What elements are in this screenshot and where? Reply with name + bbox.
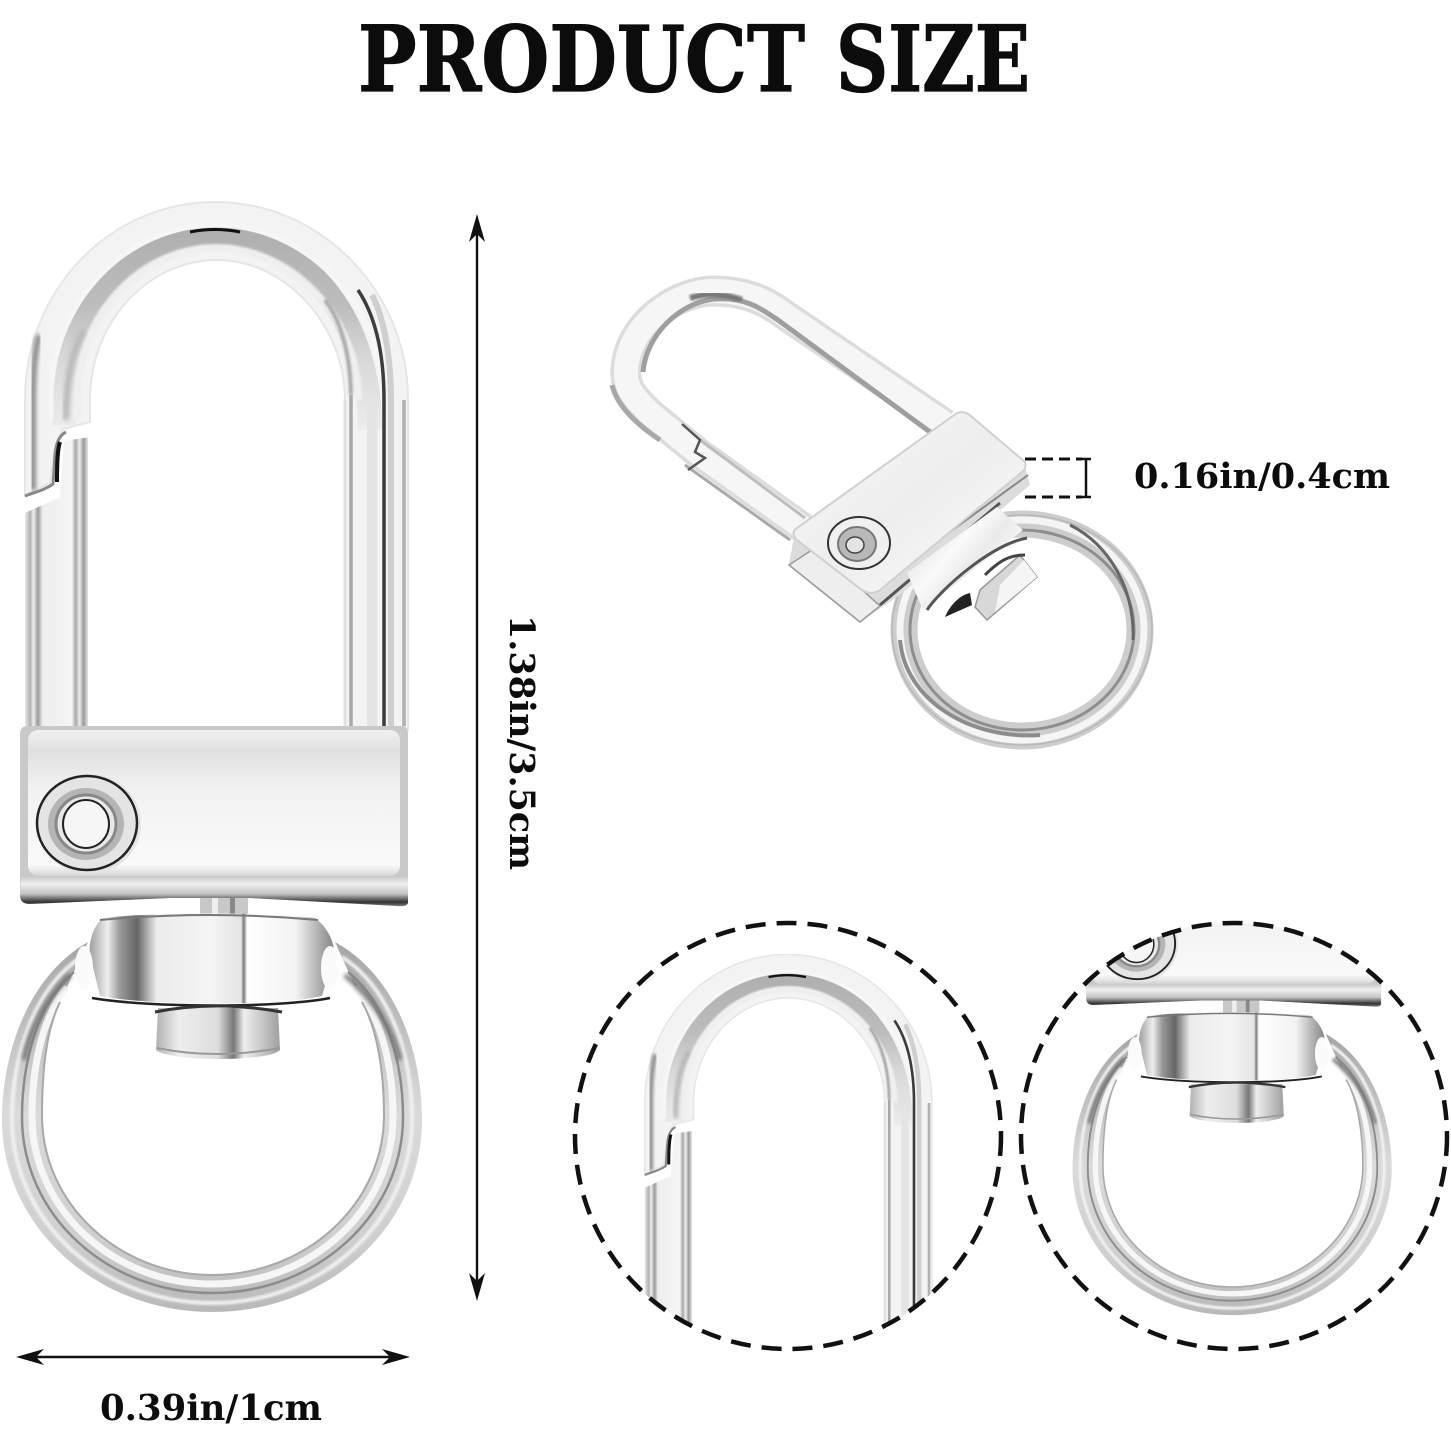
dashed outline (1021, 923, 1447, 1349)
height label: 1.38in/3.5cm (501, 615, 542, 870)
ring (892, 515, 1152, 745)
title: PRODUCT (358, 7, 805, 113)
magnified gate and loop (645, 954, 932, 1350)
loop (612, 291, 945, 540)
gate slit (682, 424, 705, 470)
thickness bracket (1025, 459, 1091, 498)
thickness label: 0.16in/0.4cm (1134, 456, 1390, 497)
title: SIZE (836, 7, 1030, 113)
magnified swivel ring (1072, 923, 1392, 1316)
angled clasp (612, 291, 1152, 745)
nut (975, 555, 1037, 620)
height arrow (469, 214, 485, 1301)
lower flange (789, 467, 1030, 622)
swivel (907, 507, 1023, 610)
detail circle: swivel ring (1018, 920, 1450, 1352)
width label: 0.39in/1cm (100, 1388, 322, 1429)
large clasp (2, 202, 422, 1312)
detail circle: loop top (575, 923, 1001, 1350)
dashed outline (575, 923, 1001, 1349)
width arrow (16, 1349, 410, 1365)
body face (794, 412, 1026, 593)
rivet (828, 517, 890, 569)
